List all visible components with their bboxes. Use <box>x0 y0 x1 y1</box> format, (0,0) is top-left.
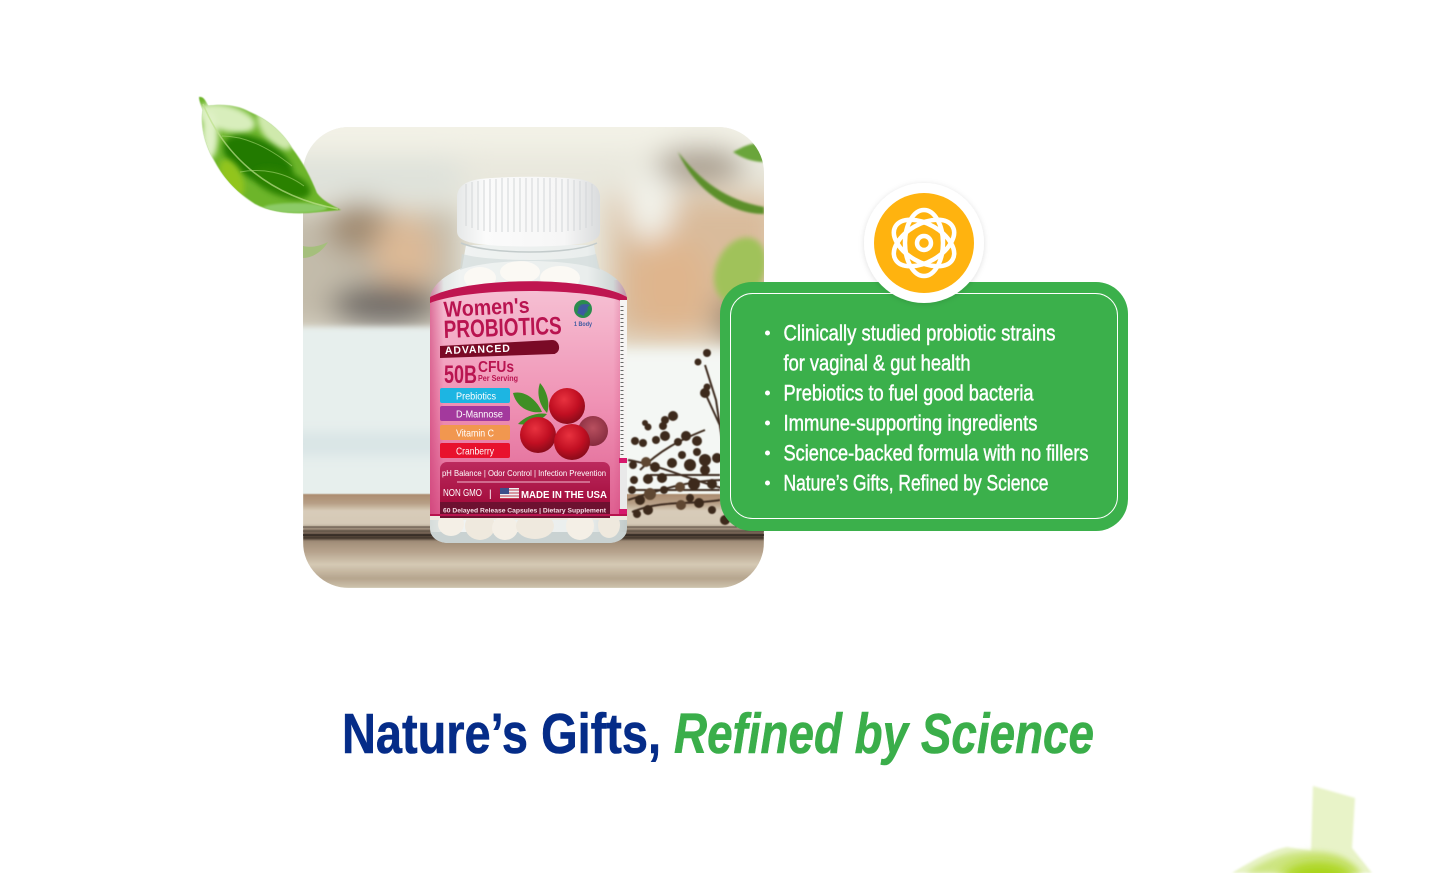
dark claims panel: MADE IN THE USA <box>521 489 607 501</box>
dark claims panel <box>430 462 627 518</box>
photo background <box>303 127 764 588</box>
bullet: nature's gifts: Nature’s Gifts, Refined by Science <box>784 470 1048 496</box>
bottle glass and capsules <box>430 245 627 544</box>
bottle cap <box>457 177 600 252</box>
50B CFUs claim: 50B <box>444 361 477 389</box>
1 Body logo: 1 Body <box>574 322 593 328</box>
probiotic bottle <box>430 177 627 544</box>
advanced ribbon: ADVANCED <box>445 343 510 357</box>
advanced ribbon <box>440 340 559 358</box>
bullet: clinically studied probiotic strains: for vaginal & gut health <box>784 350 970 376</box>
blurred leaf, bottom right <box>1232 786 1372 873</box>
ingredient tags: Prebiotics <box>456 390 496 402</box>
title <box>342 702 1094 766</box>
green benefits card <box>720 282 1128 531</box>
bullet: immune support: Immune-supporting ingredients <box>784 410 1038 436</box>
dark claims panel: | <box>489 489 492 500</box>
bullet: prebiotics: Prebiotics to fuel good bacteria <box>784 380 1034 406</box>
dark claims panel: NON GMO <box>443 488 482 499</box>
benefits list <box>765 320 1088 496</box>
dark claims panel: 60 Delayed Release Capsules | Dietary Supplement <box>443 508 607 514</box>
ingredient tags: D-Mannose <box>456 408 503 420</box>
bullet: science-backed formula: Science-backed formula with no fillers <box>784 440 1088 466</box>
label heading: Women's Probiotics <box>443 298 561 338</box>
50B CFUs claim: CFUs <box>478 359 514 376</box>
label heading: Women's Probiotics: Women's <box>443 293 530 322</box>
ingredient tags: Cranberry <box>456 446 495 458</box>
bullet: clinically studied probiotic strains <box>765 320 1056 376</box>
icon: US flag <box>500 488 519 499</box>
title: Refined by Science <box>674 702 1094 766</box>
50B CFUs claim: Per Serving <box>478 374 518 383</box>
product photo panel <box>303 127 764 588</box>
50B CFUs claim <box>444 361 518 383</box>
cranberries <box>513 383 608 460</box>
blurred background leaves <box>303 144 776 311</box>
label heading: Women's Probiotics: PROBIOTICS <box>443 312 562 344</box>
dark claims panel: pH Balance | Odor Control | Infection Prevention <box>442 469 606 478</box>
pink bottle label <box>430 280 627 518</box>
basil leaf, top left <box>194 97 341 213</box>
title: Nature’s Gifts, <box>342 702 661 766</box>
bullet: clinically studied probiotic strains: Clinically studied probiotic strains <box>784 320 1056 346</box>
dried berry twigs <box>628 349 730 525</box>
ingredient tags <box>440 388 510 458</box>
icon: atom badge <box>864 183 984 303</box>
1 Body logo <box>574 300 593 328</box>
ingredient tags: Vitamin C <box>456 428 494 440</box>
